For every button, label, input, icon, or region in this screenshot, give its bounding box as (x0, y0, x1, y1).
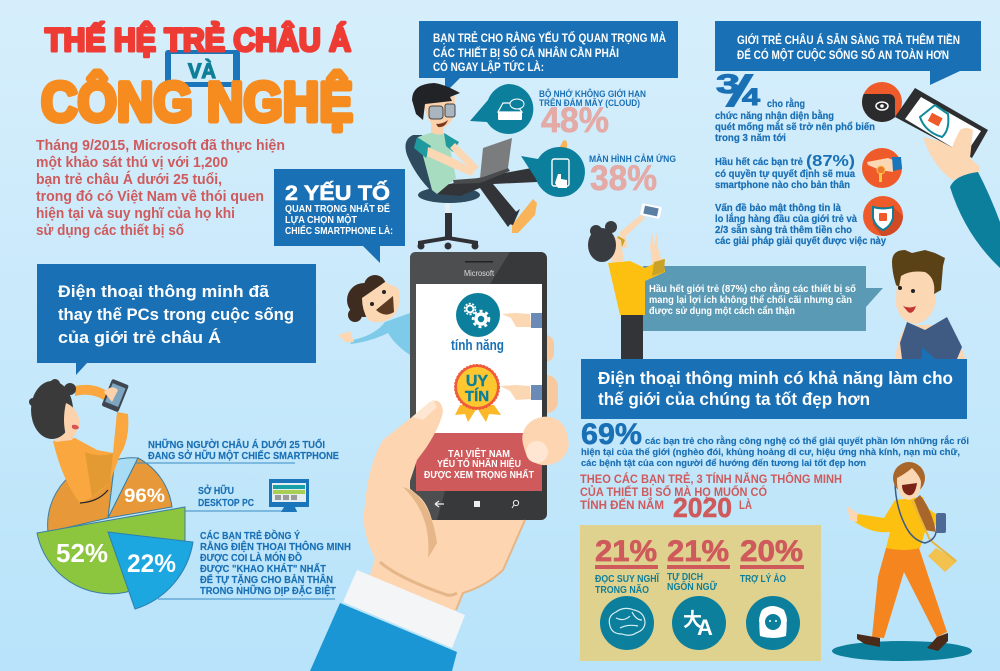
stat: 87 percent choose phone (715, 153, 855, 191)
stat: data security worry: lo lắng hàng đầu của giới trẻ và (715, 212, 857, 225)
feature: mind reading: TRONG NÃO (595, 583, 649, 596)
stat: data security worry: 2/3 sẵn sàng trả thêm tiền cho (715, 223, 852, 236)
feature: virtual assistant: TRỢ LÝ ẢO (740, 572, 786, 585)
panel: two factors: CHIẾC SMARTPHONE LÀ: (285, 224, 393, 237)
pie slice light blue (108, 458, 138, 518)
label: coveted gift: RẰNG ĐIỆN THOẠI THÔNG MINH (200, 540, 351, 553)
panel: two factors (274, 169, 405, 263)
panel: important features (419, 21, 678, 93)
icon: desktop monitor (269, 479, 309, 512)
feature: auto translate: 21% (667, 535, 729, 568)
stat: three quarters iris scanning: cho rằng (767, 97, 805, 110)
label: coveted gift: CÁC BẠN TRẺ ĐỒNG Ý (200, 529, 300, 542)
intro text: sử dụng các thiết bị số (36, 223, 184, 239)
panel: safer digital life: GIỚI TRẺ CHÂU Á SẴN SÀNG TRẢ THÊM TIỀN (737, 32, 960, 47)
title phone badge (165, 50, 240, 87)
pie slice orange (48, 460, 115, 532)
excited kid beside phone (338, 275, 410, 355)
stat: three quarters iris scanning: 4 (742, 84, 761, 111)
stat: cloud storage: TRÊN ĐÁM MÂY (CLOUD) (539, 97, 640, 109)
stat: three quarters iris scanning: quét mống mắt sẽ trở nên phổ biến (715, 120, 875, 133)
stat: data security worry: các giải pháp giải quyết được việc này (715, 235, 886, 247)
heading: features by 2020: 2020 (673, 492, 732, 523)
panel: world better: Điện thoại thông minh có khả năng làm cho (598, 368, 953, 388)
panel: important features: BẠN TRẺ CHO RẰNG YẾU TỐ QUAN TRỌNG MÀ (433, 30, 666, 45)
red panel text: YẾU TỐ NHÃN HIỆU (437, 456, 521, 470)
title line 1: THẾ HỆ TRẺ CHÂU Á (45, 22, 351, 58)
feature: auto translate (667, 535, 730, 650)
label: coveted gift: ĐƯỢC COI LÀ MÓN ĐỒ (200, 551, 302, 564)
pie slice 52 percent (37, 507, 185, 594)
person taking phone photo (588, 203, 665, 359)
stat: 69 percent: 69% (581, 418, 642, 451)
boy smiling (892, 250, 966, 360)
label: smartphone ownership (135, 438, 339, 464)
icon: shield (863, 196, 903, 236)
ribbon badge: UY (466, 373, 488, 390)
label: coveted gift: TRONG NHỮNG DỊP ĐẶC BIỆT (200, 584, 336, 597)
feature: auto translate: 大 (683, 609, 702, 631)
stat: cloud storage: 48% (541, 101, 609, 140)
speech panel: use carefully (643, 266, 883, 331)
stat: cloud storage: BỘ NHỚ KHÔNG GIỚI HẠN (539, 88, 646, 100)
fingers behind phone (536, 335, 558, 413)
man on chair with laptop (405, 83, 567, 250)
stat: touch screen: 38% (590, 159, 657, 198)
stat: 69 percent (581, 418, 969, 469)
panel: smartphones replaced PCs (37, 264, 316, 375)
bubble: cloud storage (470, 84, 533, 134)
label: desktop PC (185, 484, 297, 512)
panel: smartphones replaced PCs: thay thế PCs trong cuộc sống (58, 305, 294, 324)
hand holding secure phone (895, 88, 1000, 268)
label: coveted gift: ĐỂ TỰ TẶNG CHO BẢN THÂN (200, 573, 333, 586)
label 96 percent: 96% (124, 486, 165, 507)
icon: gears feature (456, 293, 500, 337)
panel: safer digital life (715, 21, 981, 85)
label: coveted gift (158, 529, 351, 600)
stat: 87 percent choose phone: smartphone nào cho bản thân (715, 180, 850, 191)
panel: smartphones replaced PCs: của giới trẻ châu Á (58, 328, 221, 347)
panel: important features: CÁC THIẾT BỊ SỐ CÁ NHÂN CẦN PHẢI (433, 45, 619, 60)
panel: two factors: QUAN TRỌNG NHẤT ĐỂ (285, 202, 390, 215)
ribbon badge (454, 364, 501, 422)
intro text: trong đó có Việt Nam về thói quen (36, 189, 264, 205)
icon: hand with key (862, 148, 902, 188)
phone body: Microsoft (464, 268, 495, 278)
stat: 69 percent: hiện tại của thế giới (nghèo đói, khủng hoảng di cư, hiệu ứng nhà kính, nạn mù chữ, (581, 447, 960, 458)
stat: 87 percent choose phone: (87%) (806, 153, 855, 170)
pie slice 22 percent (108, 532, 193, 609)
person with selfie phone (29, 379, 129, 503)
stat: touch screen: MÀN HÌNH CẢM ỨNG (589, 153, 676, 165)
label: smartphone ownership: ĐANG SỞ HỮU MỘT CHIẾC SMARTPHONE (148, 449, 339, 462)
pointing hand top (502, 313, 542, 328)
palm (360, 401, 525, 612)
red panel text: ĐƯỢC XEM TRỌNG NHẤT (424, 468, 534, 481)
phone body (410, 252, 547, 520)
feature: auto translate: A (697, 615, 713, 640)
stat: three quarters iris scanning: chức năng nhận diện bằng (715, 109, 834, 122)
intro text (36, 138, 285, 239)
thumb and fingers over phone (380, 400, 573, 610)
heading: features by 2020: LÀ (739, 497, 752, 512)
stat: touch screen (589, 153, 676, 198)
intro text: một khảo sát thú vị với 1,200 (36, 155, 228, 171)
ribbon badge: TÍN (465, 388, 489, 405)
feature: virtual assistant (740, 535, 804, 650)
label 52 percent: 52% (56, 538, 108, 568)
stat: 69 percent: các bạn trẻ cho rằng công nghệ có thể giải quyết phần lớn những rắc rối (645, 435, 969, 447)
red panel text: TẠI VIỆT NAM (448, 447, 510, 460)
label: desktop PC: DESKTOP PC (198, 498, 254, 509)
pointing hand bottom (500, 385, 542, 400)
label: smartphone ownership: NHỮNG NGƯỜI CHÂU Á DƯỚI 25 TUỔI (148, 438, 325, 451)
speech panel: use carefully: mang lại lợi ích không thể chối cãi nhưng cần (649, 294, 852, 306)
stat: data security worry: Vấn đề bảo mật thông tin là (715, 202, 841, 214)
panel: important features: CÓ NGAY LẬP TỨC LÀ: (433, 59, 544, 74)
heading: features by 2020: THEO CÁC BẠN TRẺ, 3 TÍNH NĂNG THÔNG MINH (580, 471, 842, 486)
icon: iris scan (862, 82, 902, 122)
stat: three quarters iris scanning (715, 69, 875, 144)
feature: virtual assistant: 20% (740, 535, 803, 568)
stat: data security worry (715, 202, 886, 247)
title (41, 22, 353, 133)
pie slice 96 percent (108, 458, 172, 518)
feature: mind reading: 21% (595, 535, 657, 568)
label: coveted gift: ĐƯỢC "KHAO KHÁT" NHẤT (200, 562, 326, 575)
pie chart (37, 458, 193, 609)
woman walking with stethoscope (832, 462, 972, 661)
feature: mind reading (595, 535, 660, 650)
heading: features by 2020: CỦA THIẾT BỊ SỐ MÀ HỌ MUỐN CÓ (580, 484, 767, 499)
label: feature: tính năng (451, 337, 504, 354)
panel: smartphones replaced PCs: Điện thoại thông minh đã (58, 282, 270, 301)
panel: safer digital life: ĐỂ CÓ MỘT CUỘC SỐNG SỐ AN TOÀN HƠN (737, 47, 949, 62)
intro text: Tháng 9/2015, Microsoft đã thực hiện (36, 138, 285, 154)
feature: auto translate: NGÔN NGỮ (667, 580, 718, 593)
stat: 87 percent choose phone: có quyền tự quyết định sẽ mua (715, 168, 855, 180)
stat: three quarters iris scanning: trong 3 năm tới (715, 133, 786, 144)
panel: two factors: 2 YẾU TỐ (285, 181, 390, 205)
feature: auto translate: TỰ DỊCH (667, 572, 703, 583)
stat: 69 percent: các bệnh tật của con người để hướng đến tương lai tốt đẹp hơn (581, 458, 866, 469)
panel: world better (581, 347, 967, 419)
panel: three features (580, 525, 821, 661)
stat: 87 percent choose phone: Hầu hết các bạn trẻ (715, 156, 803, 168)
title line 2: CÔNG NGHỆ (41, 70, 353, 133)
red panel text (424, 447, 534, 481)
panel: world better: thế giới của chúng ta tốt đẹp hơn (598, 389, 870, 409)
stat: three quarters iris scanning: 3 (716, 69, 740, 99)
sleeve (950, 172, 1000, 268)
main phone with hand (310, 252, 573, 671)
intro text: hiện tại và suy nghĩ của họ khi (36, 206, 235, 222)
bubble: touch screen (521, 147, 585, 197)
jacket sleeve (310, 603, 457, 671)
speech panel: use carefully: Hầu hết giới trẻ (87%) cho rằng các thiết bị số (649, 282, 856, 295)
heading: features by 2020: TÍNH ĐẾN NĂM (580, 497, 664, 512)
speech panel: use carefully: được sử dụng một cách cẩn thận (649, 305, 795, 317)
feature: mind reading: ĐỌC SUY NGHĨ (595, 572, 660, 585)
panel: two factors: LỰA CHỌN MỘT (285, 213, 357, 226)
label: desktop PC: SỞ HỮU (198, 484, 234, 497)
heading: features by 2020 (580, 471, 842, 523)
shirt cuff (343, 570, 465, 648)
stat: cloud storage (539, 88, 646, 140)
title phone badge: VÀ (188, 60, 216, 83)
label 22 percent: 22% (127, 550, 176, 578)
intro text: bạn trẻ châu Á dưới 25 tuổi, (36, 171, 222, 188)
